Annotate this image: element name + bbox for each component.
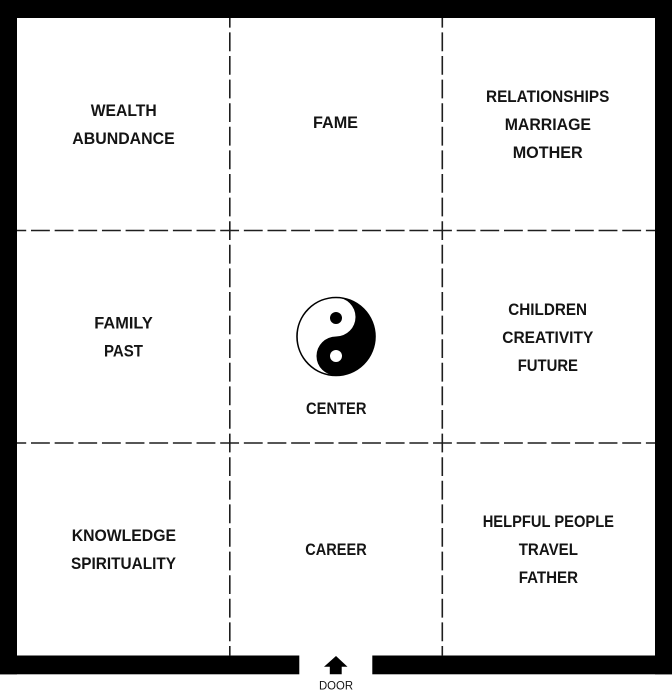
cell: career: CAREER [305, 540, 367, 559]
icon: yin-yang [297, 298, 375, 376]
cell: children: CHILDREN [508, 300, 587, 319]
arrow: door direction [324, 656, 348, 674]
cell: wealth: WEALTH [91, 101, 157, 120]
cell: relationships: RELATIONSHIPS [486, 87, 609, 106]
cell: relationships: MARRIAGE [505, 115, 591, 134]
cell: relationships: MOTHER [513, 143, 583, 162]
cell: knowledge: KNOWLEDGE [72, 526, 176, 545]
cell: relationships [486, 87, 609, 162]
cell: helpful people: TRAVEL [519, 540, 578, 559]
cell: knowledge [71, 526, 177, 573]
cell: children: FUTURE [518, 356, 578, 375]
cell: children [502, 300, 594, 375]
cell: center: CENTER [306, 399, 366, 418]
cell: family [94, 314, 153, 360]
cell: helpful people: FATHER [519, 568, 578, 587]
cell: wealth [72, 101, 175, 148]
cell: children: CREATIVITY [502, 328, 594, 347]
cell: helpful people: HELPFUL PEOPLE [483, 512, 614, 531]
cell: helpful people [483, 512, 614, 587]
cell: fame: FAME [313, 113, 358, 132]
cell: family: FAMILY [94, 314, 153, 332]
cell: wealth: ABUNDANCE [72, 129, 175, 148]
cell: knowledge: SPIRITUALITY [71, 554, 177, 573]
cell: family: PAST [104, 342, 144, 360]
